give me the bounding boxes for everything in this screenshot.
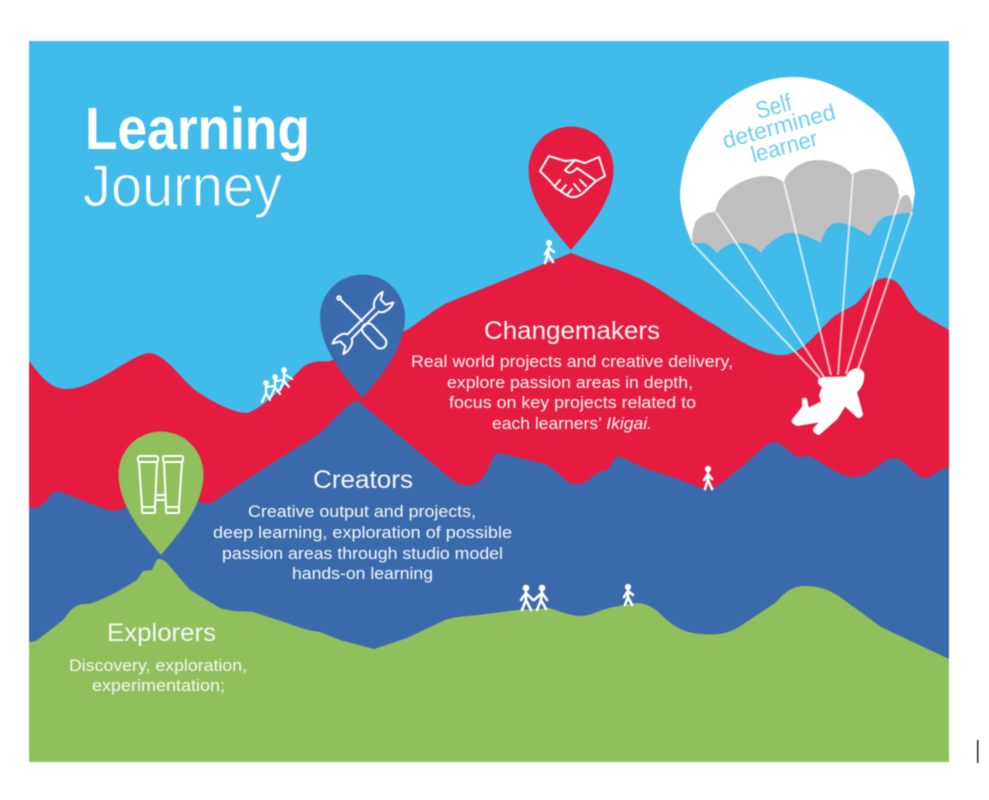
text block: Changemakers bbox=[411, 317, 733, 433]
mountain: red Changemakers ridge bbox=[29, 253, 949, 530]
walkers: group of three climbing bbox=[262, 368, 292, 402]
text block: Creators: hands-on learning bbox=[292, 565, 433, 583]
text block: Creators: passion areas through studio model bbox=[222, 545, 503, 563]
canopy text: Self determined learner: learner bbox=[748, 125, 821, 168]
title bbox=[83, 96, 310, 219]
text block: Explorers: Explorers bbox=[107, 619, 216, 647]
text block: Changemakers: Real world projects and creative delivery, bbox=[411, 353, 733, 371]
walker: in red valley bbox=[704, 467, 712, 489]
walkers: pair on green ridge bbox=[521, 586, 547, 610]
text block: Creators bbox=[213, 466, 512, 583]
pin: Changemakers (red, handshake) bbox=[528, 126, 614, 250]
text block: Changemakers: each learners’ Ikigai. bbox=[492, 415, 652, 433]
title: Learning bbox=[85, 96, 310, 162]
text block: Changemakers: explore passion areas in depth, bbox=[447, 374, 693, 392]
icon: crossed wrench and screwdriver bbox=[331, 291, 395, 355]
text block: Explorers: experimentation; bbox=[92, 677, 225, 695]
walker: on summit bbox=[545, 241, 554, 263]
icon: binoculars bbox=[138, 456, 183, 513]
text block: Creators: Creators bbox=[313, 466, 413, 494]
canopy text: Self determined learner: determined bbox=[719, 98, 838, 153]
pin: Creators (blue, tools) bbox=[320, 274, 405, 398]
canopy: grey underside bbox=[692, 160, 912, 253]
parachute bbox=[680, 77, 915, 434]
title: Journey bbox=[83, 154, 282, 219]
text block: Creators: Creative output and projects, bbox=[248, 503, 476, 521]
mountain: blue Creators ridge bbox=[29, 401, 949, 700]
text block: Changemakers: Changemakers bbox=[484, 317, 660, 345]
text block: Changemakers: focus on key projects related to bbox=[449, 394, 696, 412]
text cursor mark bbox=[977, 740, 978, 763]
text block: Creators: deep learning, exploration of possible bbox=[213, 524, 512, 542]
mountain: green Explorers ridge bbox=[29, 559, 949, 762]
canopy: white dome bbox=[680, 77, 915, 243]
text block: Explorers bbox=[69, 619, 247, 695]
walker: on green ridge bbox=[624, 585, 633, 605]
icon: handshake bbox=[540, 156, 605, 197]
canopy text: Self determined learner bbox=[714, 79, 844, 174]
text block: Explorers: Discovery, exploration, bbox=[69, 657, 247, 675]
canopy text: Self determined learner: Self bbox=[753, 89, 795, 125]
parachutist silhouette bbox=[793, 369, 863, 434]
pin: Explorers (green, binoculars) bbox=[118, 432, 204, 555]
parachute cords bbox=[692, 175, 912, 378]
